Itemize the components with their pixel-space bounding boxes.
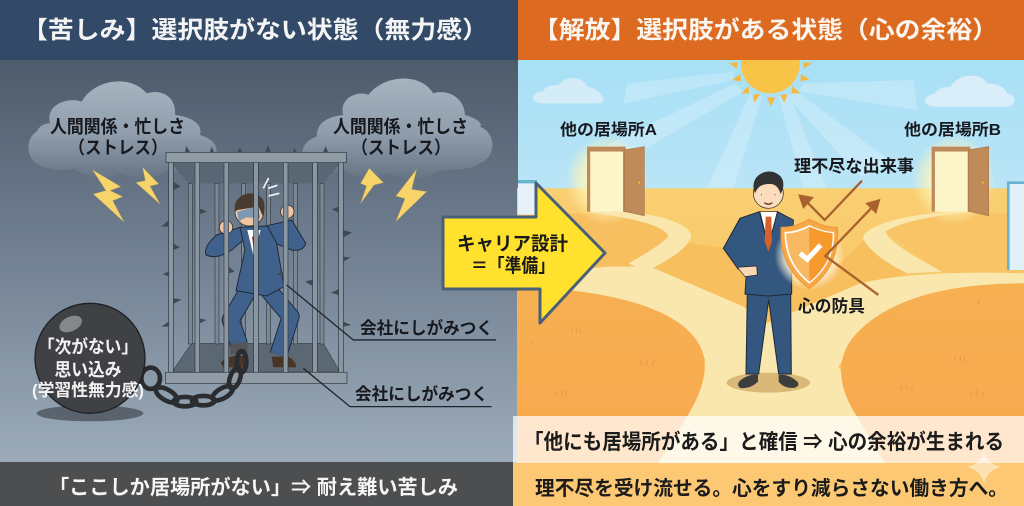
chain: [141, 351, 246, 406]
right storm cloud: [302, 78, 492, 178]
panel: left suffering scene: [0, 60, 518, 462]
sun rays: [597, 72, 917, 188]
door glow A: [565, 135, 649, 225]
check mark: [800, 245, 821, 259]
shirt and tie: [760, 212, 777, 246]
cloud subtext right: （ストレス）: [352, 138, 450, 158]
cage front bars and frame: [161, 145, 352, 383]
cloud sky right: [925, 76, 1015, 107]
suit body: [723, 212, 793, 296]
iron ball with chain: [35, 303, 246, 421]
label upper cage: 会社にしがみつく: [360, 318, 493, 338]
door A: [587, 147, 644, 216]
cage with trapped man: [161, 145, 352, 383]
sand ground: [517, 188, 1024, 506]
center arrow: キャリア設計: [457, 232, 568, 255]
panel: right liberation scene: [517, 35, 1024, 506]
legs: [746, 293, 791, 374]
center arrow: ＝「準備」: [471, 255, 555, 277]
label unreasonable events: 理不尽な出来事: [794, 157, 914, 176]
label door B: 他の居場所B: [904, 121, 1001, 139]
label door A: 他の居場所A: [560, 121, 657, 139]
ball text line 3: (学習性無力感): [32, 380, 144, 400]
door B: [932, 147, 989, 216]
label mental armor: 心の防具: [798, 297, 865, 316]
callout right lower: [513, 463, 1024, 506]
hair: [753, 172, 783, 194]
callout right lower: 理不尽を受け流せる。心をすり減らさない働き方へ。: [535, 476, 1008, 500]
lower left hill: [517, 286, 705, 463]
header right: 【解放】選択肢がある状態（心の余裕）: [533, 16, 998, 44]
hand on hip: [737, 266, 757, 277]
sun: [729, 35, 812, 107]
cloud text left: 人間関係・忙しさ: [50, 117, 185, 137]
smile: [761, 195, 775, 204]
ball: [35, 303, 145, 413]
lower right hill: [841, 283, 1024, 463]
header left: [0, 0, 518, 60]
branching cream paths: [517, 212, 1024, 463]
side window left: [518, 182, 538, 215]
ball shadow: [37, 405, 143, 421]
standing businessman with shield: [723, 172, 844, 393]
deflected arrows: [799, 181, 880, 295]
center arrow: [443, 183, 605, 323]
icon: sparkle: [967, 450, 1001, 484]
ball text line 1: 「次がない」: [38, 336, 138, 357]
shield glow: [774, 220, 844, 290]
label lower cage: 会社にしがみつく: [355, 384, 488, 404]
ball text line 2: 思い込み: [54, 360, 122, 380]
head: [753, 178, 783, 208]
icon: lightning bolts: [93, 167, 427, 222]
door glow B: [912, 135, 995, 225]
centre mid sand: [647, 240, 907, 323]
right mid hill: [885, 213, 1024, 273]
cloud sky left: [533, 78, 603, 103]
leader lines: [287, 285, 496, 407]
ball highlight: [57, 312, 85, 336]
cage interior: [171, 163, 341, 372]
callout right upper: [513, 416, 1024, 463]
side window right: [1008, 183, 1024, 270]
cloud text right: 人間関係・忙しさ: [333, 117, 468, 137]
bottom bar left: [0, 462, 513, 506]
header right: [518, 0, 1024, 60]
shield right half: [809, 227, 833, 282]
cloud subtext left: （ストレス）: [68, 138, 168, 158]
shield: [781, 219, 838, 288]
header left: 【苦しみ】選択肢がない状態（無力感）: [22, 16, 488, 44]
ground shadow: [727, 373, 810, 393]
man gripping bars: [206, 178, 306, 367]
grass tufts: [530, 299, 984, 397]
left storm cloud: [28, 81, 217, 177]
bottom bar left: 「ここしか居場所がない」⇒ 耐え難い苦しみ: [49, 475, 458, 499]
shoes: [738, 375, 758, 388]
shield inner: [785, 226, 833, 283]
left mid hill: [517, 213, 669, 273]
